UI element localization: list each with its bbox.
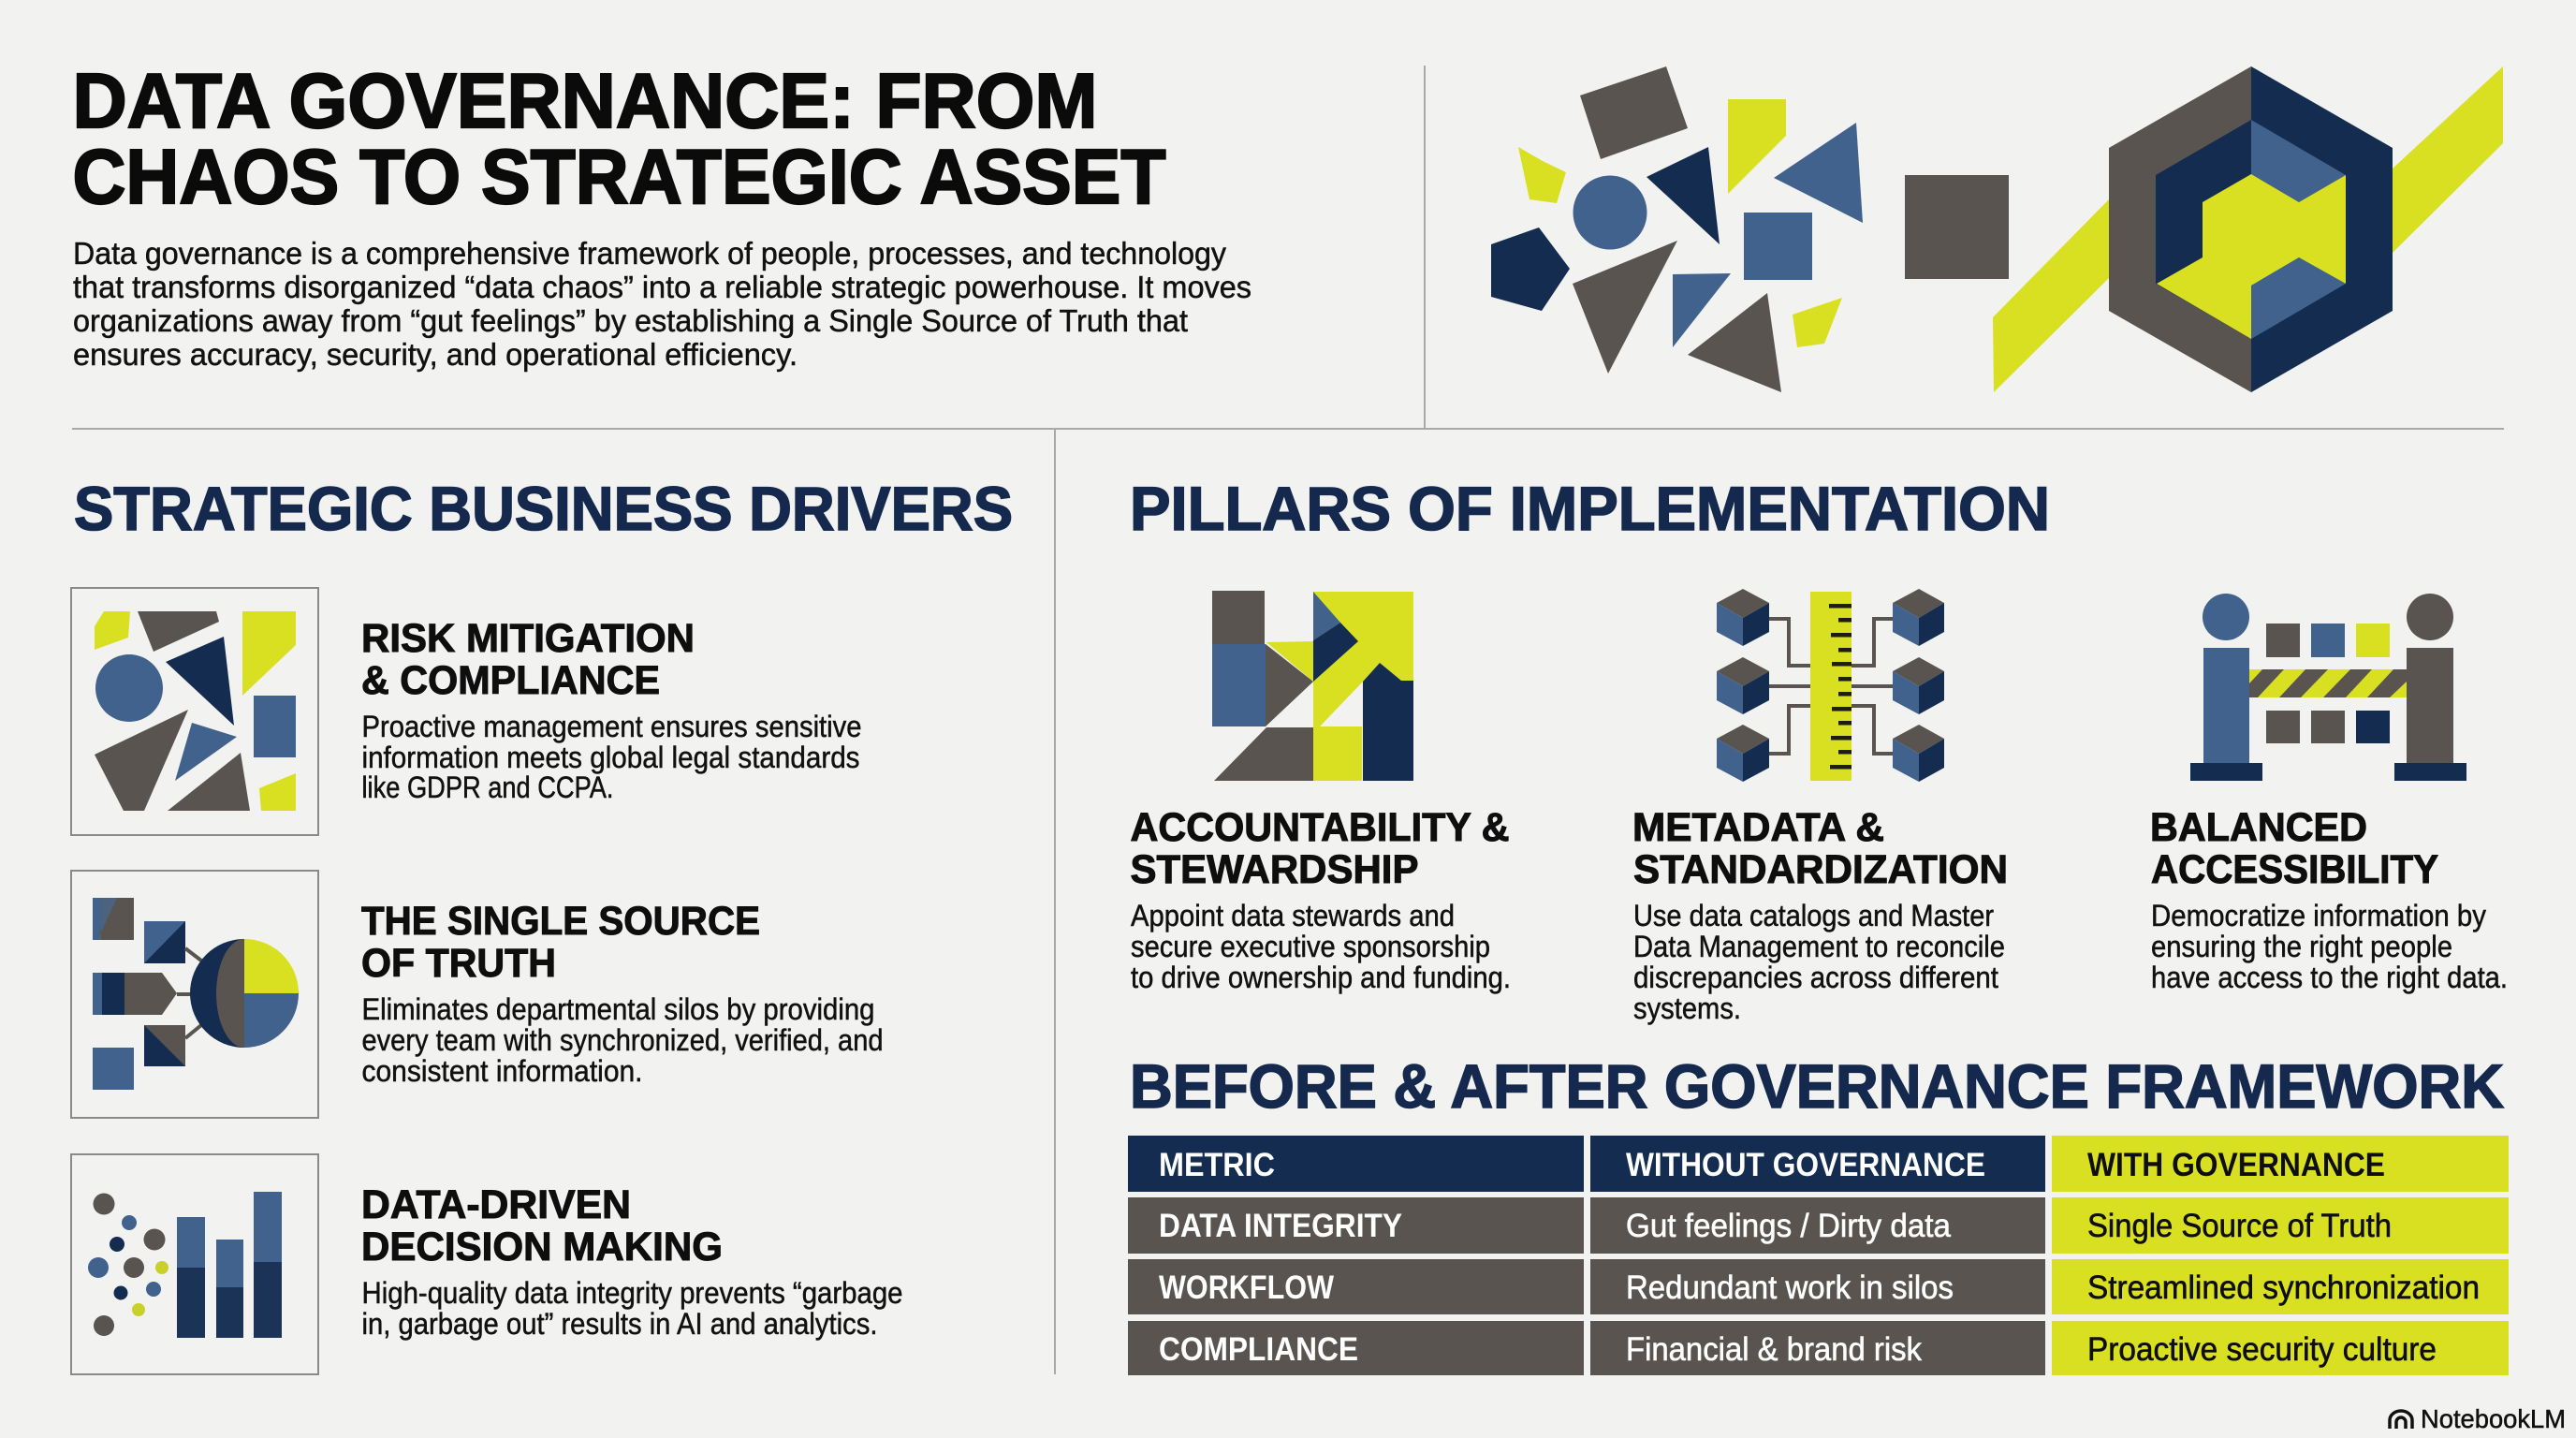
- intro paragraph: [73, 236, 1251, 372]
- pillar text: [2151, 899, 2508, 994]
- hero illustration: chaos shapes to hexagon: [1491, 66, 2503, 392]
- driver text: like GDPR and CCPA.: [361, 770, 614, 804]
- icon: ruler with data cubes: [1717, 589, 1944, 782]
- intro paragraph: ensures accuracy, security, and operational efficiency.: [73, 337, 798, 372]
- driver: data-driven decision making: [71, 1154, 902, 1374]
- pillar heading: METADATA &: [1632, 805, 1884, 850]
- pillar text: Appoint data stewards and: [1131, 899, 1455, 932]
- driver heading: THE SINGLE SOURCE: [361, 899, 760, 944]
- pillar heading: STEWARDSHIP: [1131, 847, 1419, 892]
- icon: silos feeding a pie: [71, 871, 318, 1118]
- pillar heading: BALANCED: [2150, 805, 2367, 850]
- pillar text: ensuring the right people: [2151, 930, 2452, 963]
- driver: the single source of truth: [71, 871, 884, 1118]
- pillar text: systems.: [1633, 991, 1741, 1025]
- table row: data integrity: DATA INTEGRITY: [1159, 1208, 1402, 1244]
- rising yellow band: [1993, 66, 2503, 392]
- table row: compliance: Financial & brand risk: [1626, 1331, 1922, 1368]
- scattered chaos shapes: [1491, 66, 1863, 392]
- comparison table: [1128, 1136, 2509, 1375]
- driver text: every team with synchronized, verified, and: [361, 1023, 884, 1057]
- pillar text: have access to the right data.: [2151, 961, 2508, 994]
- driver text: High-quality data integrity prevents “garbage: [361, 1276, 902, 1310]
- driver text: [361, 1276, 902, 1341]
- driver text: [361, 992, 884, 1088]
- driver text: consistent information.: [361, 1054, 642, 1088]
- table row: compliance: COMPLIANCE: [1159, 1331, 1358, 1368]
- brand mark: NotebookLM: NotebookLM: [2421, 1404, 2566, 1433]
- driver heading: OF TRUTH: [361, 941, 556, 986]
- intro paragraph: that transforms disorganized “data chaos” into a reliable strategic powerhouse. It moves: [73, 270, 1251, 304]
- pillar heading: STANDARDIZATION: [1633, 847, 2008, 892]
- driver text: information meets global legal standards: [361, 741, 859, 774]
- title: CHAOS TO STRATEGIC ASSET: [73, 133, 1166, 220]
- intro paragraph: Data governance is a comprehensive framework of people, processes, and technology: [73, 236, 1226, 271]
- table row: workflow: [1128, 1259, 2509, 1314]
- table header row: [1128, 1136, 2509, 1192]
- pillar text: discrepancies across different: [1633, 961, 1998, 994]
- heading: strategic business drivers: STRATEGIC BUSINESS DRIVERS: [74, 474, 1013, 543]
- table row: workflow: WORKFLOW: [1159, 1269, 1334, 1306]
- pillar text: secure executive sponsorship: [1131, 930, 1490, 963]
- table row: workflow: Redundant work in silos: [1626, 1269, 1954, 1306]
- icon: two people with barrier: [2190, 594, 2466, 781]
- ordered hexagon: [2109, 66, 2393, 392]
- driver heading: [361, 1182, 723, 1269]
- driver heading: DECISION MAKING: [361, 1225, 723, 1269]
- pillar text: Democratize information by: [2151, 899, 2486, 932]
- table row: data integrity: Gut feelings / Dirty data: [1626, 1208, 1951, 1244]
- heading: before and after framework: BEFORE & AFTER GOVERNANCE FRAMEWORK: [1130, 1051, 2504, 1121]
- table row: data integrity: Single Source of Truth: [2087, 1208, 2392, 1244]
- pillar heading: [1131, 805, 1509, 892]
- pillar heading: [1632, 805, 2008, 892]
- driver heading: & COMPLIANCE: [361, 658, 660, 703]
- driver text: in, garbage out” results in AI and analytics.: [361, 1307, 878, 1341]
- table row: workflow: Streamlined synchronization: [2087, 1269, 2480, 1306]
- pillar text: [1633, 899, 2005, 1025]
- driver heading: [361, 899, 760, 986]
- driver heading: [361, 616, 695, 703]
- table header row: METRIC: [1159, 1147, 1275, 1183]
- pillar text: [1131, 899, 1511, 994]
- table row: compliance: [1128, 1321, 2509, 1375]
- pillar: balanced accessibility: [2150, 594, 2508, 994]
- driver heading: DATA-DRIVEN: [361, 1182, 631, 1227]
- pillar: metadata and standardization: [1632, 589, 2008, 1025]
- icon: scattered risk shapes: [71, 588, 318, 835]
- icon: dots to bar chart: [71, 1154, 318, 1374]
- pillar text: Use data catalogs and Master: [1633, 899, 1994, 932]
- pillar text: Data Management to reconcile: [1633, 930, 2005, 963]
- driver text: Eliminates departmental silos by providing: [361, 992, 874, 1026]
- table header row: WITHOUT GOVERNANCE: [1626, 1147, 1985, 1183]
- driver text: [361, 710, 861, 804]
- intro paragraph: organizations away from “gut feelings” by establishing a Single Source of Truth that: [73, 303, 1188, 338]
- pillar heading: ACCOUNTABILITY &: [1131, 805, 1509, 850]
- central gray square: [1905, 175, 2009, 279]
- pillar: accountability and stewardship: [1131, 591, 1511, 994]
- pillar text: to drive ownership and funding.: [1131, 961, 1511, 994]
- title: DATA GOVERNANCE: FROM: [73, 57, 1097, 144]
- driver heading: RISK MITIGATION: [361, 616, 695, 661]
- table header row: WITH GOVERNANCE: [2087, 1147, 2385, 1183]
- heading: pillars of implementation: PILLARS OF IMPLEMENTATION: [1130, 474, 2050, 543]
- pillar heading: [2150, 805, 2438, 892]
- table row: compliance: Proactive security culture: [2087, 1331, 2437, 1368]
- driver: risk mitigation and compliance: [71, 588, 861, 835]
- table row: data integrity: [1128, 1197, 2509, 1254]
- pillar heading: ACCESSIBILITY: [2151, 847, 2438, 892]
- icon: geometric arrow: [1212, 591, 1413, 781]
- driver text: Proactive management ensures sensitive: [361, 710, 861, 743]
- title: [73, 57, 1166, 220]
